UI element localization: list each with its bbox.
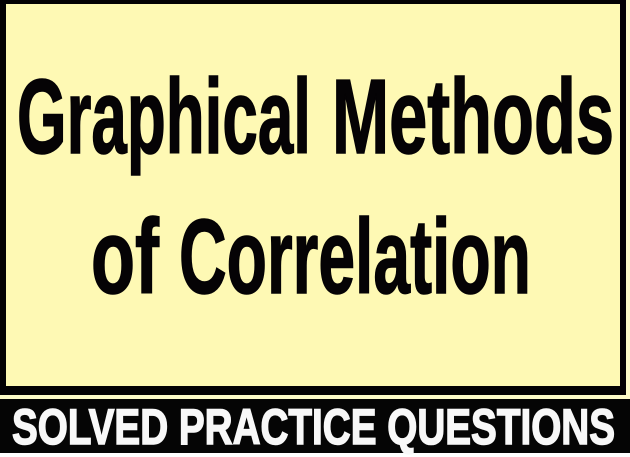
pale strip between panel and banner (0, 395, 630, 399)
banner: solved practice questions (0, 399, 630, 455)
title line 1: Graphical (17, 58, 311, 176)
title line 2: of (91, 198, 159, 316)
title line 2 (91, 198, 531, 316)
